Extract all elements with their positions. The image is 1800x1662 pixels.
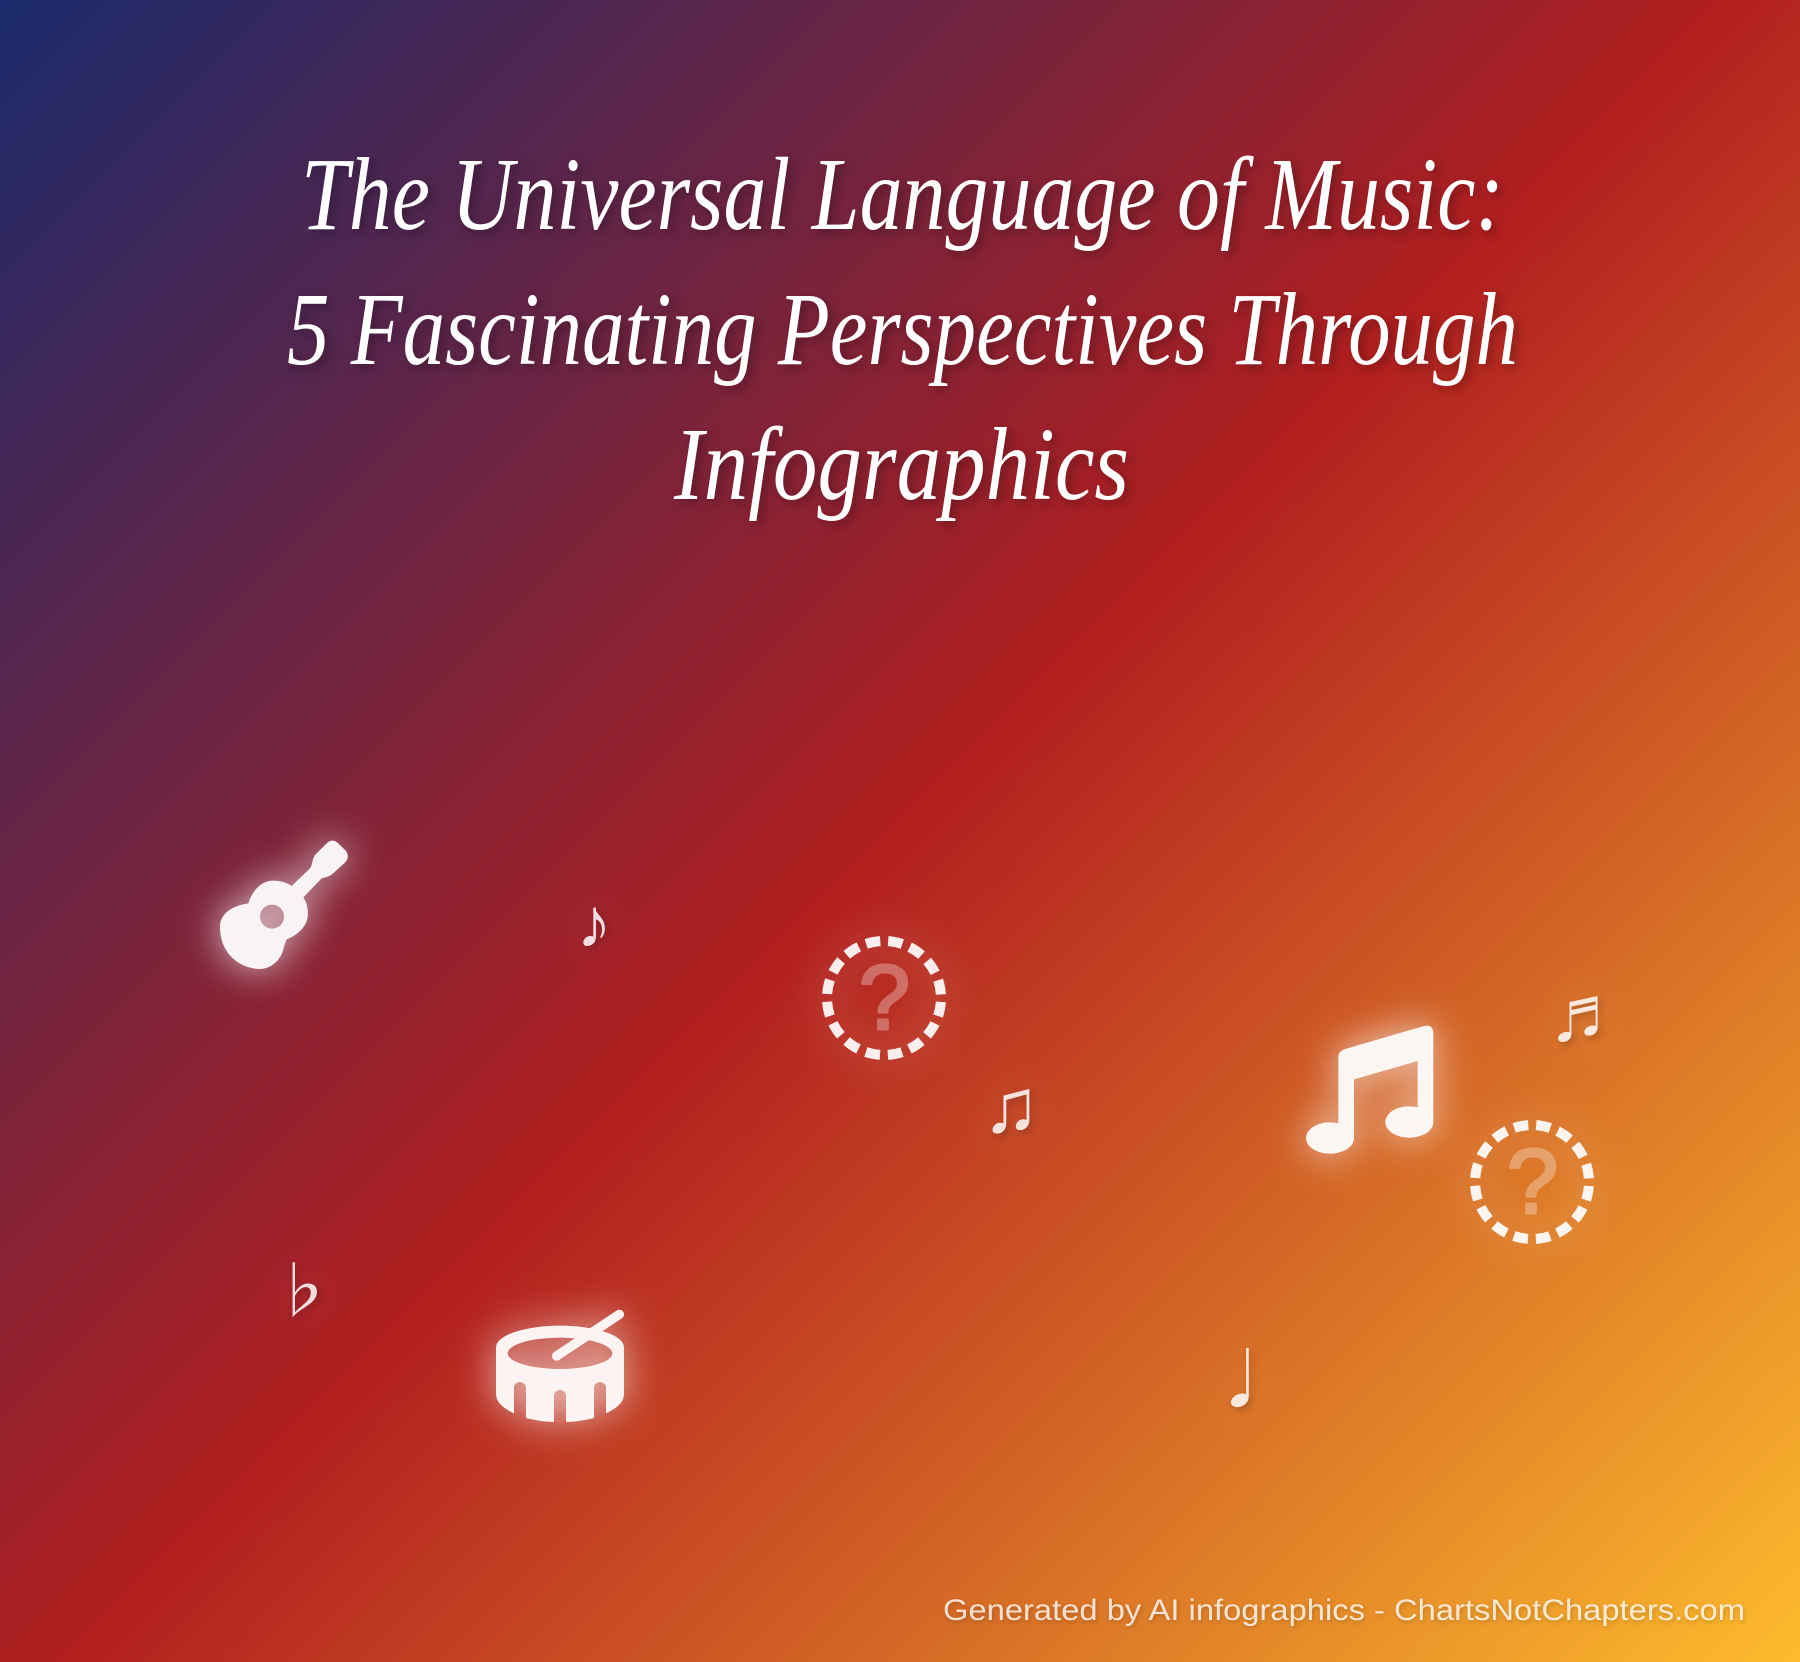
icon: quarter note: ♩ [1213, 1329, 1277, 1421]
icon: beamed notes: ♫ [982, 1064, 1040, 1149]
title [287, 137, 1518, 522]
icon: sixteenth notes: ♬ [1557, 981, 1605, 1051]
footer: Generated by AI infographics - ChartsNotChapters.com [943, 1594, 1745, 1627]
title line 3: Infographics [673, 407, 1129, 522]
icon: flat sign: ♭ [271, 1241, 333, 1331]
title line 2: 5 Fascinating Perspectives Through [287, 272, 1518, 387]
icon: question circle 2 [1475, 1125, 1589, 1239]
title line 1: The Universal Language of Music: [301, 137, 1504, 252]
dashed ring [1475, 1125, 1589, 1239]
dashed ring [827, 941, 941, 1055]
icon: guitar [220, 841, 348, 969]
icon: music [1306, 1026, 1433, 1154]
icon: eighth note: ♪ [576, 884, 612, 962]
question mark: ? [859, 947, 910, 1049]
icon: drum [496, 1314, 624, 1422]
icon: question circle 1 [827, 941, 941, 1055]
question mark: ? [1507, 1131, 1558, 1233]
